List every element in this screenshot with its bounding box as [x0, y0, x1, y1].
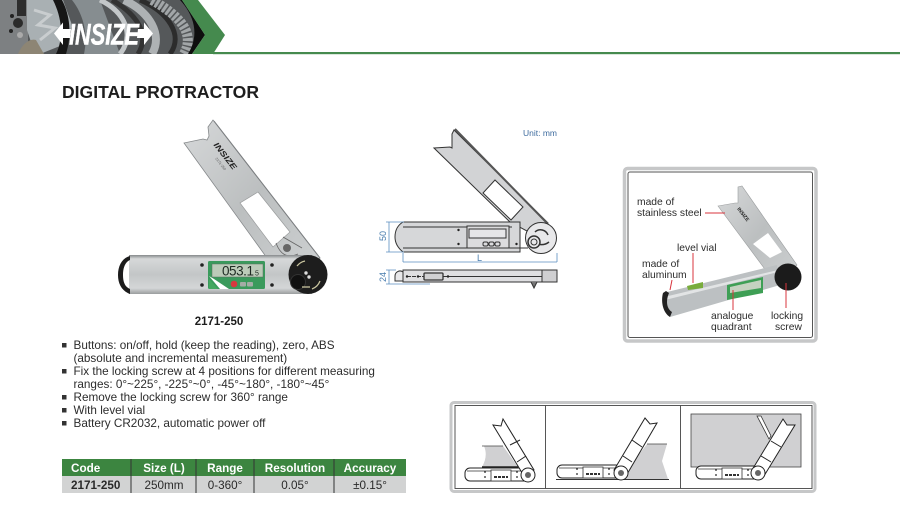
- product photo: digital protractor: [118, 120, 328, 294]
- LCD display: [208, 261, 265, 289]
- callout labels: analogue: [711, 311, 754, 322]
- LCD display: 053.1: [222, 264, 254, 278]
- feature list: Battery CR2032, automatic power off: [74, 417, 266, 430]
- screws: [200, 263, 274, 287]
- panel: features callout: [624, 168, 816, 341]
- callout labels: level vial: [677, 243, 716, 254]
- side view: [395, 270, 557, 288]
- specification table: ±0.15°: [353, 479, 387, 492]
- steel arm: 2171-250: [214, 157, 227, 171]
- title: DIGITAL PROTRACTOR: [62, 82, 259, 102]
- dimension drawing: [378, 128, 557, 288]
- callout product photo: [662, 186, 802, 317]
- dimension 24: 24: [378, 272, 388, 282]
- specification table: Code: [71, 462, 101, 475]
- callout product photo: INSIZE: [735, 207, 750, 223]
- top view: [395, 129, 556, 254]
- specification table: 2171-250: [71, 479, 121, 492]
- green header line: [213, 52, 900, 54]
- feature list: ranges: 0°~225°, -225°~0°, -45°~180°, -180°~45°: [74, 378, 329, 391]
- specification table: Resolution: [265, 462, 325, 475]
- usage: blade against work: [691, 414, 801, 480]
- specification table: 0-360°: [208, 479, 242, 492]
- feature list: Remove the locking screw for 360° range: [74, 391, 288, 404]
- callout labels: made of: [637, 197, 674, 208]
- product code caption: 2171-250: [195, 316, 243, 328]
- LCD display: 5: [255, 270, 259, 278]
- specification table: 250mm: [145, 479, 183, 492]
- callout labels: stainless steel: [637, 208, 702, 219]
- steel arm: INSIZE: [212, 141, 239, 172]
- usage: inside angle: [465, 419, 535, 482]
- specification table: Accuracy: [344, 462, 397, 475]
- specification table: Size (L): [143, 462, 185, 475]
- callout labels: made of: [642, 259, 679, 270]
- callout labels: [637, 197, 803, 333]
- INSIZE logo: INSIZE: [69, 18, 140, 52]
- dimension 50: 50: [378, 231, 388, 241]
- locking dial: [288, 255, 328, 294]
- callout labels: screw: [775, 322, 802, 333]
- specification table: Range: [207, 462, 243, 475]
- aluminium body: [129, 255, 312, 294]
- feature list: With level vial: [74, 404, 145, 417]
- usage: outside angle: [556, 418, 669, 480]
- callout labels: aluminum: [642, 270, 687, 281]
- feature list: (absolute and incremental measurement): [74, 352, 287, 365]
- feature list: Fix the locking screw at 4 positions for different measuring: [74, 365, 375, 378]
- feature list: [62, 339, 375, 430]
- red leader lines: [670, 213, 786, 310]
- callout labels: quadrant: [711, 322, 752, 333]
- steel arm: [184, 120, 320, 276]
- black end handle: [118, 256, 130, 294]
- panel: usage diagrams: [451, 402, 815, 492]
- dimension L: L: [477, 253, 482, 263]
- feature list: Buttons: on/off, hold (keep the reading), zero, ABS: [74, 339, 335, 352]
- header photo: machinery: [0, 0, 210, 54]
- specification table: 0.05°: [281, 479, 309, 492]
- header banner: [0, 0, 900, 54]
- unit label: Unit: mm: [523, 128, 557, 138]
- specification table: [62, 459, 406, 493]
- green chevron: [182, 0, 225, 54]
- callout labels: locking: [771, 311, 803, 322]
- dimension lines: [386, 222, 557, 284]
